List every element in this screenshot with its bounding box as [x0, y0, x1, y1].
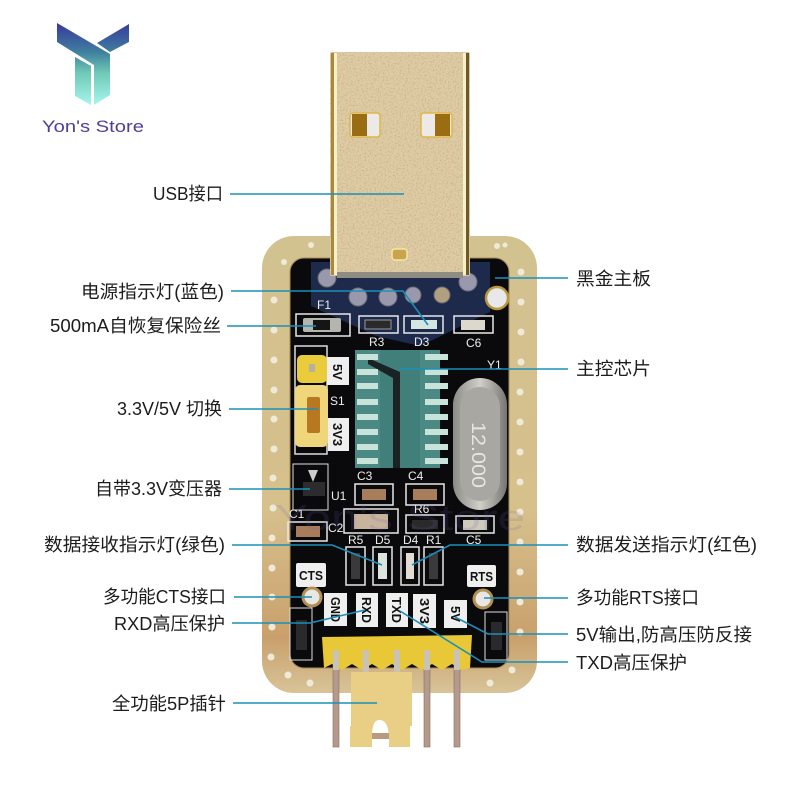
D5 LED: D5	[375, 533, 391, 547]
RTS pad: RTS	[470, 569, 493, 584]
right window	[421, 113, 452, 137]
mounting hole	[486, 287, 508, 309]
U1 regulator: U1	[331, 489, 347, 503]
R1 resistor	[424, 533, 443, 585]
callout: 主控芯片: 主控芯片	[576, 359, 651, 379]
left window	[350, 113, 380, 137]
D4 LED: D4	[403, 533, 419, 547]
callout: 5V输出,防高压防反接	[455, 617, 752, 645]
side components	[290, 608, 507, 660]
R6 resistor: R6	[414, 502, 430, 516]
short pins	[333, 650, 460, 674]
R3 resistor: R3	[369, 335, 385, 349]
C6 capacitor	[454, 316, 493, 350]
small dimple	[392, 249, 407, 260]
callout: USB接口: USB接口	[153, 184, 223, 204]
Y1 crystal: 12.000	[467, 422, 488, 488]
callout: 自带3.3V变压器: 自带3.3V变压器	[95, 479, 222, 499]
C4 capacitor: C4	[408, 469, 424, 483]
C2 capacitor	[328, 509, 398, 535]
yellow header	[322, 635, 472, 670]
D3 LED	[404, 316, 443, 349]
black solder mask	[290, 258, 509, 668]
C3 capacitor: C3	[357, 469, 373, 483]
C1 capacitor: C1	[289, 507, 305, 521]
R3 resistor	[359, 316, 398, 349]
pin labels: 3V3	[417, 598, 432, 624]
pin labels: TXD	[389, 597, 404, 623]
callout: 多功能RTS接口: 多功能RTS接口	[576, 588, 699, 608]
main chip	[355, 350, 448, 468]
gold board edge	[262, 236, 537, 693]
store watermark: Yon's Store	[275, 497, 525, 538]
logo mark	[57, 23, 129, 105]
shell edge highlights	[331, 53, 469, 275]
C3 capacitor	[355, 469, 393, 505]
Y1 crystal	[453, 358, 507, 510]
jumper bridge	[372, 733, 389, 739]
callout: 500mA自恢复保险丝: 500mA自恢复保险丝	[50, 316, 221, 336]
blue watermark tint	[311, 262, 490, 346]
through-hole pads	[318, 269, 477, 306]
R1 resistor: R1	[426, 533, 442, 547]
logo text: Yon's Store	[42, 117, 144, 136]
R6 resistor	[406, 502, 444, 533]
callout: 数据发送指示灯(红色): 数据发送指示灯(红色)	[576, 535, 757, 555]
USB connector	[330, 52, 470, 278]
R5 resistor	[346, 533, 365, 585]
D3 LED: D3	[414, 335, 430, 349]
S1 jumper	[295, 346, 349, 454]
pin labels: 5V	[448, 606, 463, 622]
pin labels: GND	[328, 597, 343, 622]
logo	[42, 23, 144, 136]
R5 resistor: R5	[348, 533, 364, 547]
S1 jumper: 3V3	[330, 423, 345, 446]
Y1 crystal: Y1	[487, 358, 502, 372]
pin header and jumper	[322, 635, 472, 747]
CTS pad: CTS	[299, 568, 323, 583]
callout: 数据发送指示灯(红色)	[412, 535, 757, 565]
edge holes	[268, 242, 524, 686]
callout: TXD高压保护	[400, 611, 687, 673]
callout: 黑金主板: 黑金主板	[576, 269, 651, 289]
callout: TXD高压保护: TXD高压保护	[576, 653, 687, 673]
CTS pad	[296, 563, 326, 606]
C2 capacitor: C2	[328, 521, 344, 535]
circuit board	[262, 236, 537, 693]
pin labels	[324, 593, 467, 628]
metal lip	[337, 272, 463, 278]
callout: 数据接收指示灯(绿色): 数据接收指示灯(绿色)	[44, 535, 225, 555]
S1 jumper: S1	[330, 394, 345, 408]
F1 fuse: F1	[317, 298, 331, 312]
D4 LED	[401, 533, 419, 585]
F1 fuse	[296, 298, 350, 336]
C6 capacitor: C6	[466, 336, 482, 350]
C4 capacitor	[406, 469, 444, 505]
RTS pad	[467, 565, 496, 608]
callout: RXD高压保护: RXD高压保护	[114, 614, 225, 634]
callout: 3.3V/5V 切换: 3.3V/5V 切换	[117, 399, 222, 419]
callout: 全功能5P插针: 全功能5P插针	[112, 694, 226, 714]
callout: 5V输出,防高压防反接: 5V输出,防高压防反接	[576, 625, 752, 645]
pin labels: RXD	[359, 597, 374, 623]
U1 regulator	[293, 464, 347, 510]
S1 jumper: 5V	[330, 364, 345, 380]
C5 capacitor	[456, 516, 494, 547]
D5 LED	[373, 533, 392, 585]
chip pins	[357, 354, 448, 464]
C1 capacitor	[288, 507, 327, 541]
callout: RXD高压保护	[114, 610, 365, 634]
metal shell	[330, 52, 470, 276]
yellow jumper cap	[350, 672, 412, 747]
callout: 数据接收指示灯(绿色)	[44, 535, 382, 565]
C5 capacitor: C5	[466, 533, 482, 547]
callout: 电源指示灯(蓝色): 电源指示灯(蓝色)	[81, 282, 224, 302]
callout: 电源指示灯(蓝色)	[81, 282, 428, 325]
long pins	[333, 650, 460, 747]
callout: 多功能CTS接口: 多功能CTS接口	[103, 587, 226, 607]
